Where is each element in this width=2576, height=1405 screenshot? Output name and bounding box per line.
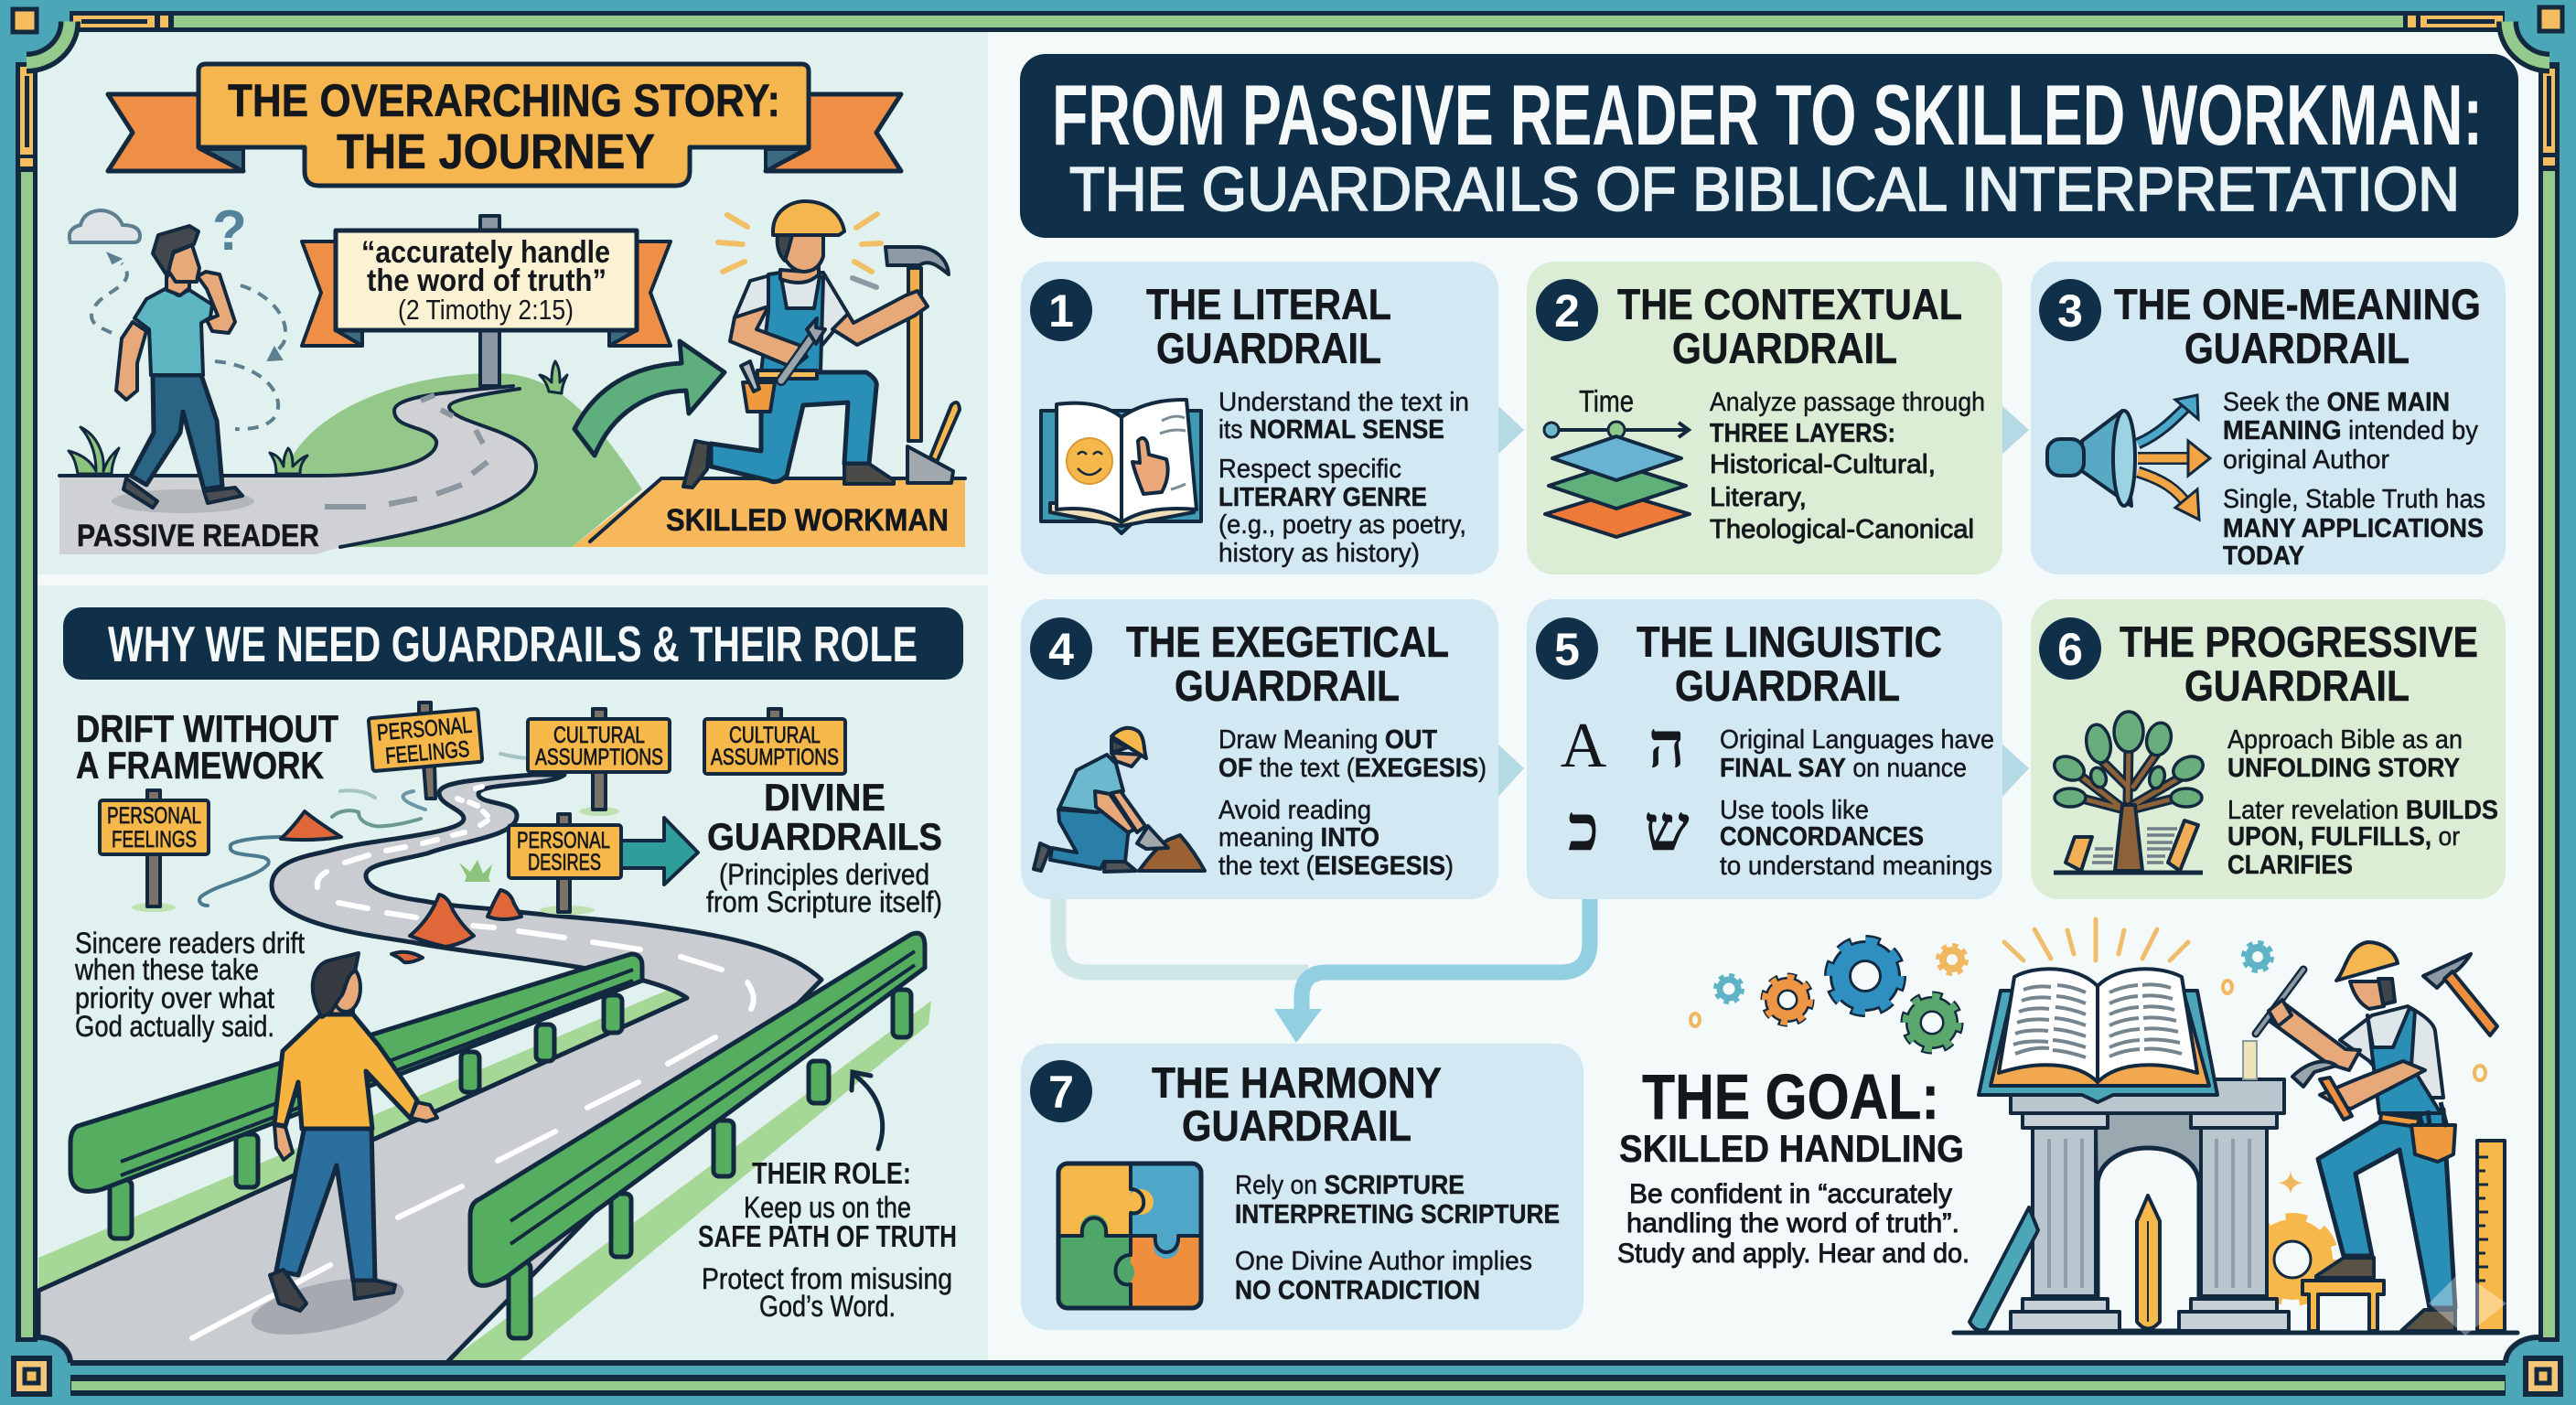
text: divine guardrails: from Scripture itself) (706, 885, 942, 918)
text: unfolding story: Later revelation BUILDS (2227, 796, 2498, 825)
heading (1146, 280, 1391, 372)
number badge 5: 5 (1554, 624, 1580, 675)
signpost: accurately handle the word of truth: (2 Timothy 2:15) (398, 294, 574, 326)
icon: four-piece puzzle (1058, 1164, 1201, 1308)
text: three layers: THREE LAYERS: (1710, 419, 1895, 448)
sign: cultural assumptions second: CULTURAL (729, 723, 821, 748)
figure: passive reader (70, 199, 319, 553)
heading (1152, 1058, 1442, 1150)
sign: personal desires: PERSONAL (517, 828, 610, 853)
text: unfolding story (2227, 725, 2498, 880)
sign: personal desires (509, 814, 621, 915)
text: original languages: Use tools like (1720, 796, 1869, 825)
figure: person walking (246, 953, 437, 1346)
icon: original language letters: ש (1644, 794, 1690, 864)
text: their role: SAFE PATH OF TRUTH (698, 1219, 957, 1253)
heading (1126, 617, 1449, 710)
text: their role: God’s Word. (759, 1290, 896, 1323)
text: scripture interpreting scripture (1235, 1171, 1560, 1305)
text: their role: Protect from misusing (702, 1262, 952, 1295)
text: the goal: THE GOAL: (1642, 1061, 1939, 1132)
icon: timeline with three layers (1544, 384, 1690, 537)
panel: the overarching story (38, 32, 988, 574)
text: sincere readers drift: priority over what (75, 981, 274, 1014)
card 2: contextual guardrail (1527, 262, 2002, 574)
figure: passive reader: PASSIVE READER (77, 519, 319, 553)
ground: skilled workman (572, 477, 965, 547)
text: their role: Keep us on the (744, 1191, 911, 1224)
icon: megaphone with three arrows (2047, 395, 2210, 520)
text: original languages (1720, 725, 1994, 881)
number badge 3 (2039, 279, 2101, 341)
icon: original language letters: A (1561, 711, 1607, 781)
text: unfolding story: UNFOLDING STORY (2227, 754, 2460, 783)
text: unfolding story: CLARIFIES (2227, 851, 2353, 880)
icon: yellow gear behind pillar (2252, 1219, 2333, 1300)
guardrail: right (470, 933, 925, 1338)
banner: the journey (108, 64, 901, 186)
text: unfolding story: UPON, FULFILLS, or (2227, 822, 2460, 852)
number badge 1: 1 (1048, 285, 1074, 337)
figure: passive reader: ? (212, 199, 247, 263)
number badge 3: 3 (2057, 285, 2083, 337)
sign: cultural assumptions second (704, 709, 845, 774)
heading: GUARDRAIL (2184, 661, 2410, 710)
signpost: accurately handle the word of truth: the word of truth” (367, 263, 606, 298)
banner: the journey: THE JOURNEY (337, 124, 655, 179)
text: divine guardrails (706, 776, 942, 918)
text: one main meaning: TODAY (2223, 542, 2304, 571)
winding road (59, 386, 536, 554)
text: drift without a framework: A FRAMEWORK (76, 744, 324, 787)
sign: personal feelings lower: PERSONAL (107, 803, 201, 829)
text: one main meaning: MEANING intended by (2223, 416, 2478, 445)
heading: THE LINGUISTIC (1637, 617, 1942, 666)
sign: cultural assumptions second: ASSUMPTIONS (711, 745, 839, 770)
text: divine guardrails: GUARDRAILS (707, 815, 942, 858)
heading (2120, 617, 2478, 710)
text: three layers (1710, 388, 1985, 544)
sign: cultural assumptions (528, 709, 670, 816)
text: one main meaning: Single, Stable Truth has (2223, 485, 2485, 514)
flow arrows between cards (1497, 404, 2029, 799)
text: divine guardrails: (Principles derived (719, 858, 929, 891)
card 5: linguistic guardrail (1527, 599, 2002, 899)
number badge 5 (1536, 617, 1598, 680)
heading: THE PROGRESSIVE (2120, 617, 2478, 666)
text: scripture interpreting scripture: Rely on SCRIPTURE (1235, 1171, 1465, 1200)
icon: original language letters: ה (1648, 711, 1685, 781)
sign: personal feelings lower: FEELINGS (112, 827, 197, 853)
text: normal sense and literary genre: history as history) (1218, 539, 1420, 568)
title banner: THE GUARDRAILS OF BIBLICAL INTERPRETATION (1069, 155, 2460, 224)
icon: open book with smile and pointing hand (1041, 400, 1201, 533)
text: sincere readers drift (74, 927, 305, 1043)
arrow: toward divine guardrails (621, 818, 698, 885)
text: exegesis vs eisegesis: Avoid reading (1218, 796, 1371, 825)
icon: kneeling digger (1034, 728, 1205, 872)
text: original languages: FINAL SAY on nuance (1720, 754, 1967, 783)
banner: the journey: THE OVERARCHING STORY: (228, 75, 780, 126)
number badge 6 (2039, 617, 2101, 680)
icon: timeline with three layers: Time (1579, 384, 1634, 418)
heading: GUARDRAIL (1156, 324, 1381, 372)
text: sincere readers drift: when these take (74, 953, 259, 986)
card 4: exegetical guardrail (1021, 599, 1498, 899)
figure: goal workman (2256, 942, 2497, 1331)
text: the goal (1617, 1061, 1970, 1269)
illustration: open book (1979, 969, 2217, 1102)
panel: why we need guardrails (38, 585, 988, 1363)
sign: personal feelings lower (100, 790, 209, 912)
faint watermark diamond (2429, 1271, 2506, 1335)
heading: GUARDRAIL (1675, 661, 1900, 710)
arrow: their role (852, 1072, 883, 1149)
text: normal sense and literary genre: (e.g., poetry as poetry, (1218, 510, 1466, 540)
card 3: one-meaning guardrail (2031, 262, 2506, 574)
text: scripture interpreting scripture: NO CONTRADICTION (1235, 1276, 1480, 1305)
sign: personal feelings (369, 702, 482, 799)
text: exegesis vs eisegesis: OF the text (EXEGESIS) (1218, 754, 1487, 783)
heading (1617, 280, 1962, 372)
text: three layers: Historical-Cultural, (1710, 450, 1936, 479)
heading bar: why we need guardrails and their role (63, 607, 963, 680)
text: normal sense and literary genre: Understand the text in (1218, 388, 1469, 417)
text: the goal: SKILLED HANDLING (1619, 1127, 1964, 1170)
text: drift without a framework (76, 707, 338, 787)
heading: THE EXEGETICAL (1126, 617, 1449, 666)
icon: original language letters (1561, 711, 1690, 864)
number badge 2: 2 (1554, 285, 1580, 337)
heading bar: why we need guardrails and their role: WHY WE NEED GUARDRAILS & THEIR ROLE (108, 616, 918, 672)
text: their role: THEIR ROLE: (752, 1156, 911, 1190)
icon: gears (1690, 943, 2485, 1080)
rocks (281, 811, 521, 962)
sign: cultural assumptions: CULTURAL (553, 723, 645, 748)
illustration: goal pillars (2011, 1041, 2289, 1331)
text: three layers: Analyze passage through (1710, 388, 1985, 417)
connectors to card seven (1058, 899, 1590, 1043)
number badge 7 (1030, 1060, 1092, 1122)
heading: GUARDRAIL (1672, 324, 1897, 372)
heading (1637, 617, 1942, 710)
text: original languages: CONCORDANCES (1720, 822, 1924, 852)
text: exegesis vs eisegesis: Draw Meaning OUT (1218, 725, 1437, 755)
heading (2114, 280, 2481, 372)
text: exegesis vs eisegesis: meaning INTO (1218, 823, 1379, 853)
text: one main meaning (2223, 388, 2485, 571)
text: one main meaning: Seek the ONE MAIN (2223, 388, 2450, 417)
sign: personal feelings: FEELINGS (384, 736, 470, 769)
text: three layers: Literary, (1710, 483, 1807, 512)
text: the goal: handling the word of truth”. (1626, 1208, 1959, 1239)
signpost: accurately handle the word of truth (302, 216, 671, 386)
heading: THE HARMONY (1152, 1058, 1442, 1107)
heading: GUARDRAIL (2184, 324, 2410, 372)
text: original languages: Original Languages have (1720, 725, 1994, 755)
icon: light rays over book (2004, 919, 2188, 960)
text: normal sense and literary genre (1218, 388, 1469, 568)
text: drift without a framework: DRIFT WITHOUT (76, 707, 338, 750)
text: sincere readers drift: Sincere readers drift (75, 927, 305, 960)
text: exegesis vs eisegesis (1218, 725, 1487, 881)
card 7: harmony guardrail (1021, 1044, 1583, 1330)
text: their role (698, 1156, 957, 1323)
text: unfolding story: Approach Bible as an (2227, 725, 2463, 755)
illustration: pencils, ruler and stool (1954, 1141, 2517, 1333)
number badge 7: 7 (1048, 1067, 1074, 1118)
heading: THE ONE-MEANING (2114, 280, 2481, 328)
sign: personal feelings: PERSONAL (376, 713, 473, 746)
text: normal sense and literary genre: its NORMAL SENSE (1218, 415, 1444, 445)
text: exegesis vs eisegesis: the text (EISEGESIS) (1218, 852, 1454, 881)
text: one main meaning: MANY APPLICATIONS (2223, 514, 2484, 543)
text: original languages: to understand meanings (1720, 852, 1992, 881)
number badge 4 (1030, 617, 1092, 680)
signpost: accurately handle the word of truth: “accurately handle (361, 235, 610, 270)
heading: THE LITERAL (1146, 280, 1391, 328)
grass tuft (459, 860, 492, 882)
title banner (1020, 54, 2518, 238)
card 1: literal guardrail (1021, 262, 1498, 574)
sign: personal desires: DESIRES (528, 850, 601, 875)
text: divine guardrails: DIVINE (764, 776, 886, 819)
number badge 2 (1536, 279, 1598, 341)
text: normal sense and literary genre: Respect specific (1218, 455, 1401, 484)
text: normal sense and literary genre: LITERARY GENRE (1218, 483, 1427, 512)
card 6: progressive guardrail (2031, 599, 2506, 899)
number badge 4: 4 (1048, 624, 1074, 675)
text: the goal: Be confident in “accurately (1629, 1179, 1952, 1209)
ground: skilled workman: SKILLED WORKMAN (666, 503, 949, 538)
road scene (38, 754, 931, 1363)
number badge 6: 6 (2057, 624, 2083, 675)
text: scripture interpreting scripture: INTERPRETING SCRIPTURE (1235, 1200, 1560, 1229)
text: sincere readers drift: God actually said. (75, 1010, 274, 1043)
text: three layers: Theological-Canonical (1710, 515, 1974, 544)
hill (283, 373, 642, 547)
icon: growing tree with scrolls (2051, 712, 2206, 873)
heading: THE CONTEXTUAL (1617, 280, 1962, 328)
text: one main meaning: original Author (2223, 445, 2389, 475)
icon: original language letters: כ (1568, 794, 1599, 864)
guardrail: left (70, 954, 642, 1239)
sign: cultural assumptions: ASSUMPTIONS (535, 745, 663, 770)
text: scripture interpreting scripture: One Divine Author implies (1235, 1247, 1532, 1276)
text: the goal: Study and apply. Hear and do. (1617, 1239, 1970, 1269)
number badge 1 (1030, 279, 1092, 341)
figure: skilled workman (683, 201, 960, 488)
arrow: progress to workman (574, 341, 724, 456)
heading: GUARDRAIL (1175, 661, 1400, 710)
grass tufts (69, 361, 567, 474)
heading: GUARDRAIL (1182, 1101, 1411, 1150)
